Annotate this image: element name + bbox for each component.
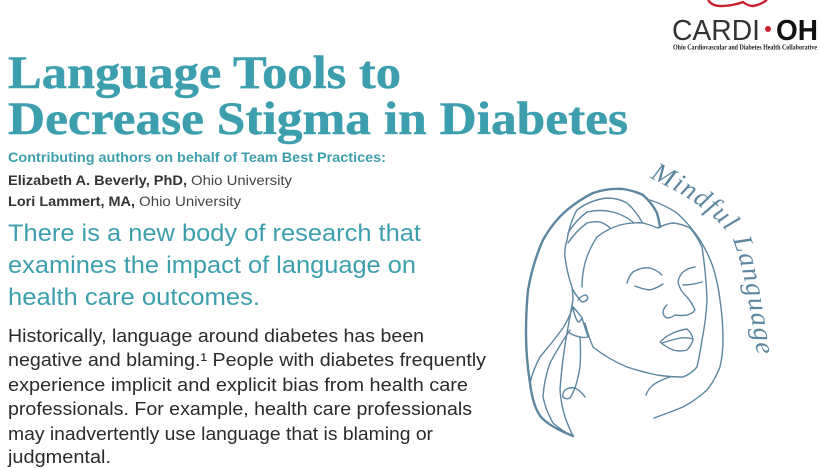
face contour xyxy=(582,223,707,377)
body paragraph: negative and blaming.¹ People with diabetes frequently xyxy=(8,349,487,370)
authors block: Ohio University xyxy=(139,193,241,209)
authors block: Elizabeth A. Beverly, PhD, xyxy=(8,172,187,188)
logo: CARDI-OH xyxy=(672,0,818,52)
text: Mindful Language: Mindful Language xyxy=(650,163,770,354)
body paragraph xyxy=(7,325,487,467)
body paragraph: professionals. For example, health care professionals xyxy=(8,398,472,419)
body paragraph: Historically, language around diabetes has been xyxy=(8,325,424,346)
logo wordmark xyxy=(672,15,818,47)
jaw to neck line xyxy=(646,377,670,395)
title xyxy=(8,47,628,145)
hair inner strands xyxy=(567,198,642,240)
illustration: line-art woman's face xyxy=(524,163,770,438)
hair outer outline xyxy=(526,189,660,436)
intro statement: There is a new body of research that xyxy=(8,220,421,247)
intro statement xyxy=(8,220,421,311)
lips xyxy=(660,329,693,351)
authors block xyxy=(8,149,386,209)
logo wordmark: CARDI xyxy=(672,15,760,47)
authors block: Ohio University xyxy=(191,172,292,188)
authors block: Lori Lammert, MA, xyxy=(8,193,135,209)
title: Decrease Stigma in Diabetes xyxy=(8,93,628,145)
body paragraph: experience implicit and explicit bias from health care xyxy=(8,374,468,395)
icon: red Ohio outline xyxy=(708,0,767,6)
title: Language Tools to xyxy=(8,47,401,99)
body paragraph: may inadvertently use language that is blaming or xyxy=(8,423,433,444)
logo wordmark: OH xyxy=(776,15,818,47)
authors block: Contributing authors on behalf of Team Best Practices: xyxy=(8,149,386,165)
earring top xyxy=(573,290,588,302)
hair right side xyxy=(650,200,723,418)
intro statement: examines the impact of language on xyxy=(8,252,416,279)
ear xyxy=(568,307,588,338)
intro statement: health care outcomes. xyxy=(8,284,260,311)
long hair strands xyxy=(530,307,573,383)
body paragraph: judgmental. xyxy=(7,446,111,467)
left eye closed xyxy=(627,268,663,290)
nose and right eye xyxy=(663,267,695,318)
long earring xyxy=(563,337,585,399)
